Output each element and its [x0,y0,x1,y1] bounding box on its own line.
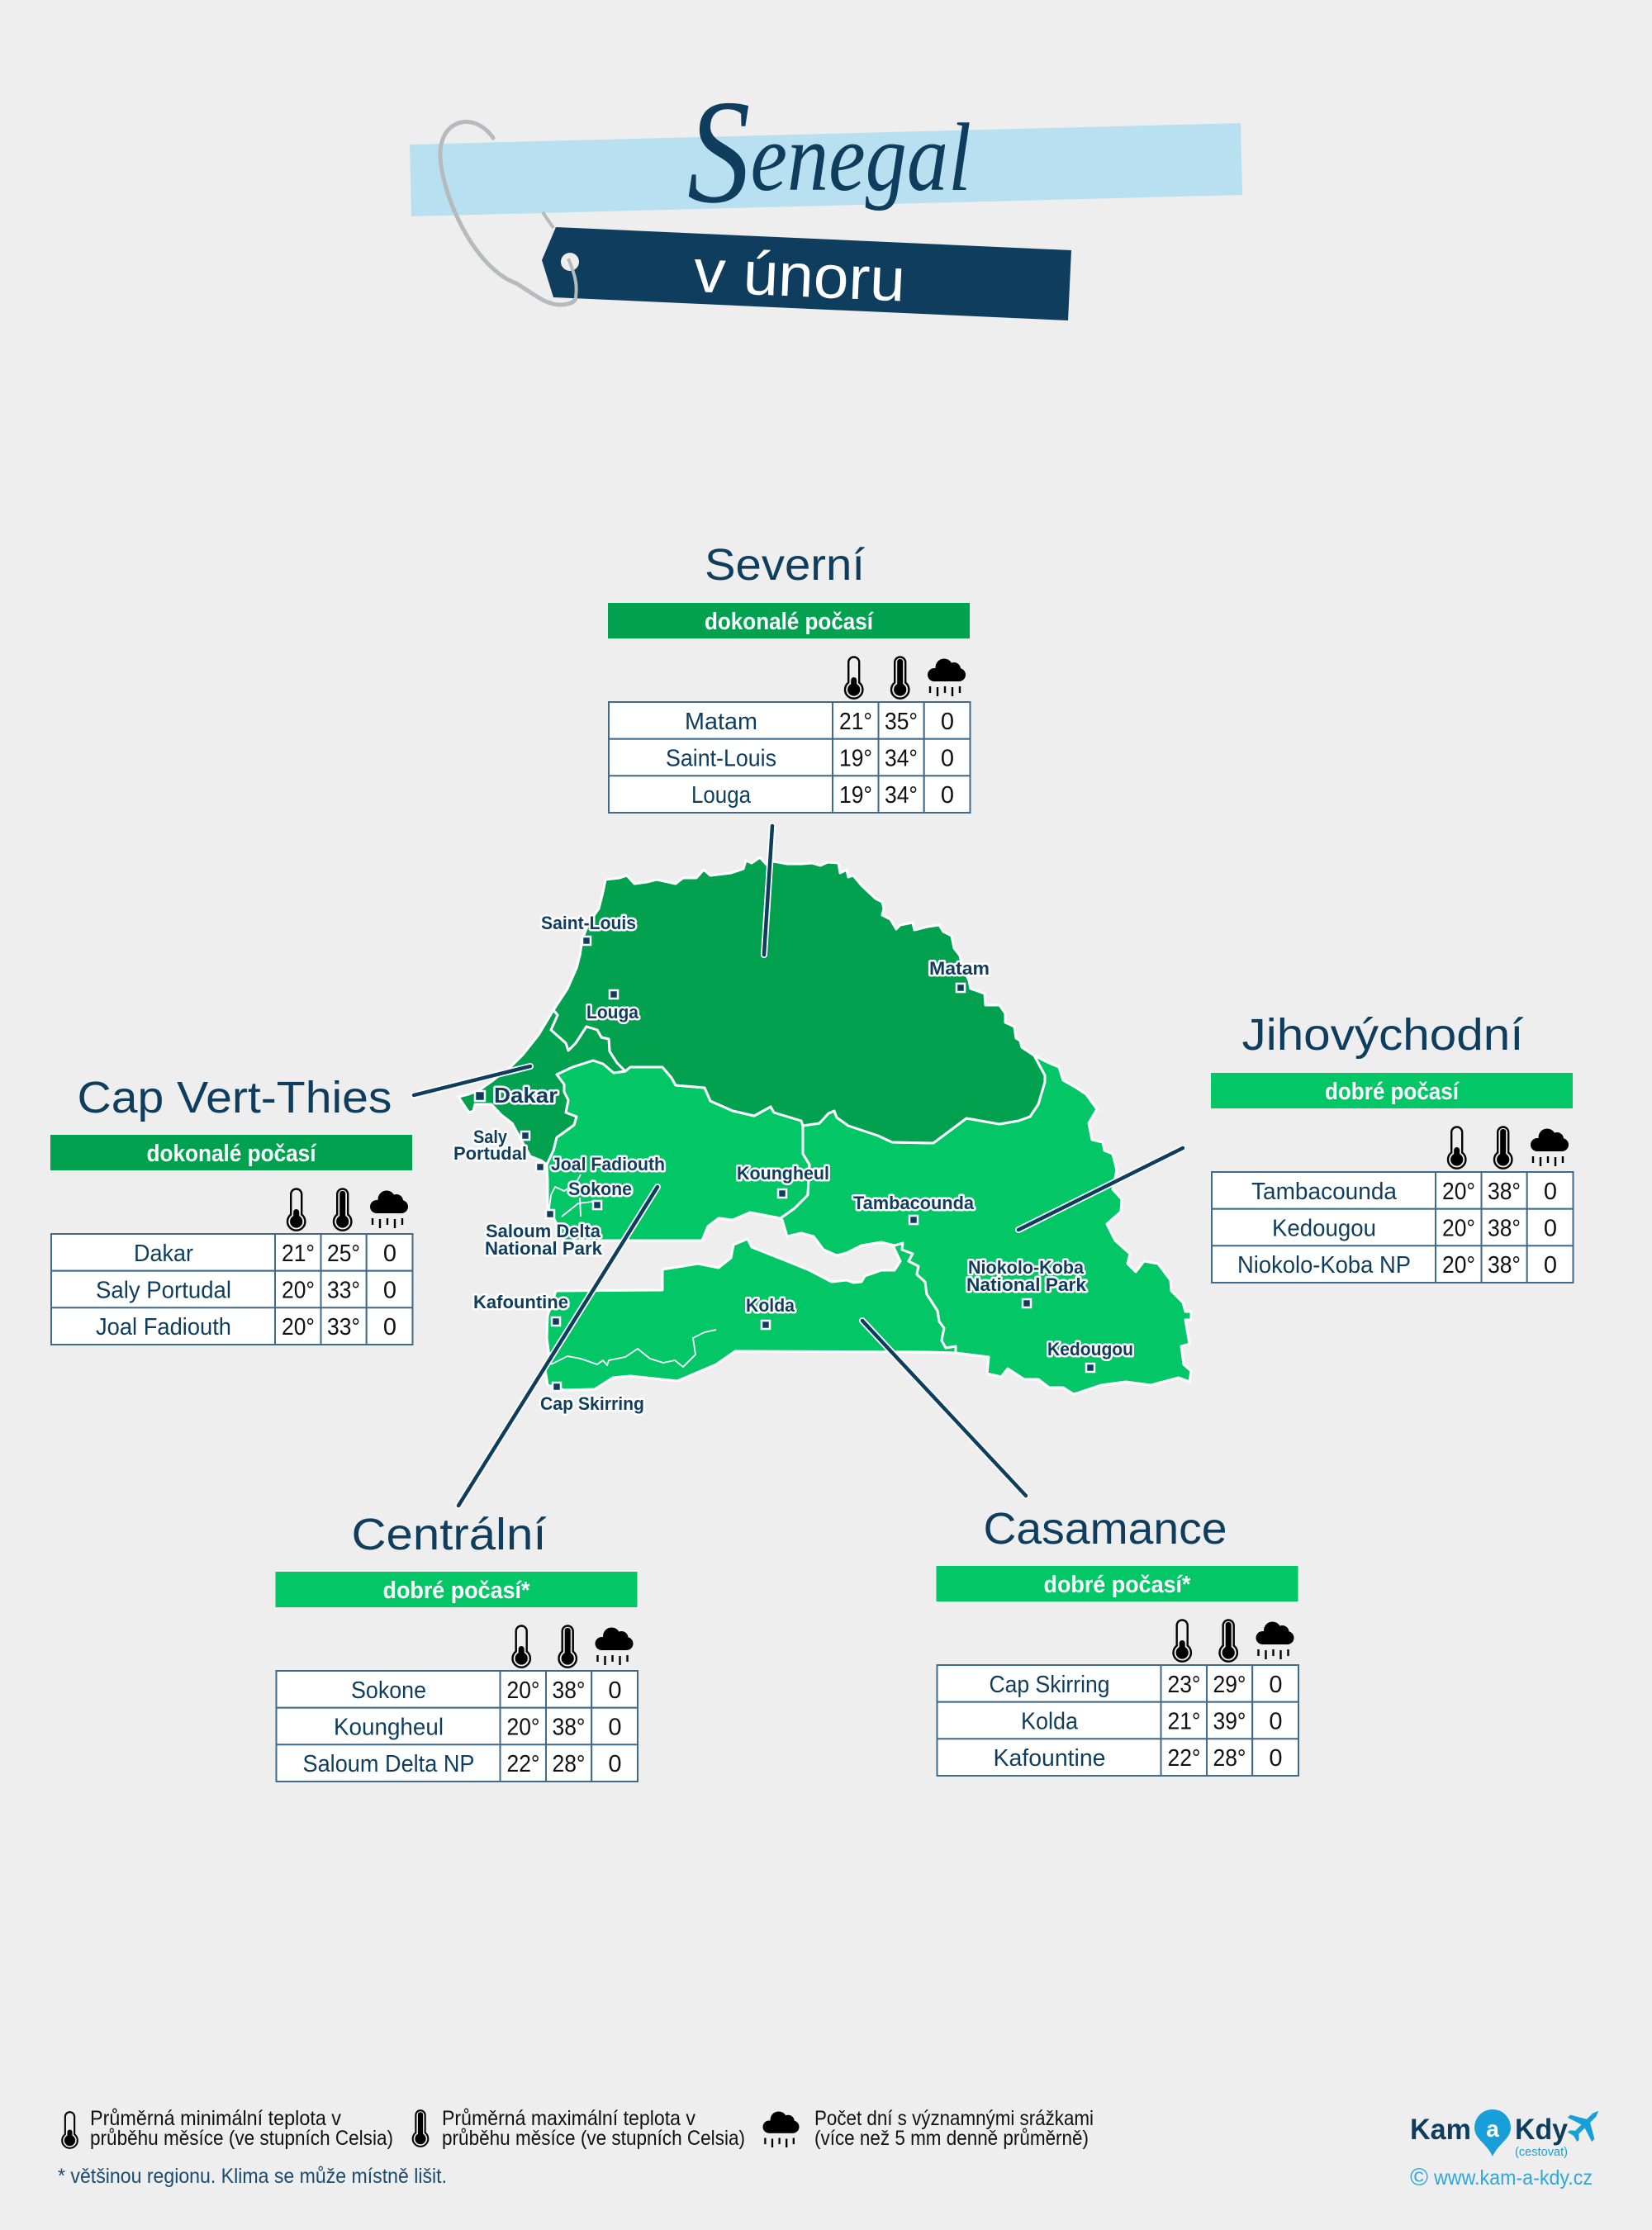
climate table: 20° [507,1677,540,1704]
city: Kolda: Kolda [746,1295,795,1316]
climate table: 38° [552,1715,585,1741]
title band [410,123,1242,216]
city: Louga: Louga [586,1002,639,1022]
climate table: 20° [507,1715,540,1741]
city: Niokolo-Koba National Park: National Park [966,1274,1087,1295]
climate table: 0 [1544,1252,1557,1279]
climate table: 0 [941,709,954,735]
city: Cap Skirring: Cap Skirring [540,1393,644,1414]
weather band: dokonalé počasí [147,1141,316,1167]
legend [58,2107,1094,2188]
legend item: rainy days [763,2107,1094,2150]
city: Joal Fadiouth: Joal Fadiouth [551,1154,665,1174]
column icons [512,1625,633,1668]
city: Cap Skirring [540,1383,644,1414]
panel: Cap Vert-Thies [50,1073,413,1345]
city: Saly Portudal: Portudal [453,1143,527,1164]
climate table: 29° [1213,1672,1246,1698]
city: Matam [929,958,990,992]
title: Senegal: S [687,70,750,235]
legend item: maximum temperature: Průměrná maximální teplota v [442,2107,695,2130]
column icons [1173,1620,1294,1662]
weather band: dobré počasí [1325,1079,1460,1105]
climate table: 0 [941,782,954,809]
leader line: Centrální [458,1187,657,1506]
column icons [287,1189,408,1231]
climate table: 20° [282,1314,315,1340]
city: Kedougou: Kedougou [1047,1339,1133,1359]
string front [543,212,577,305]
heading: Centrální [352,1510,547,1559]
climate table: Kafountine [993,1745,1105,1772]
column icons [1448,1127,1569,1169]
climate table [937,1665,1298,1776]
logo word: Kam: Kam [1410,2114,1471,2146]
climate table: 20° [282,1277,315,1303]
city: Niokolo-Koba National Park: Niokolo-Koba [968,1257,1085,1278]
climate table: 0 [1269,1672,1283,1698]
city: Saly Portudal: Saly [473,1127,508,1147]
weather band [276,1572,638,1607]
climate table: 38° [1488,1216,1521,1242]
climate table [51,1234,413,1345]
city: Niokolo-Koba National Park [966,1257,1087,1307]
region: Cap Vert-Thies [458,1010,625,1165]
logo word: Kdy: Kdy [1515,2114,1569,2146]
climate table: 28° [1213,1745,1246,1772]
logo pin [1474,2109,1511,2156]
climate table: 39° [1213,1708,1246,1734]
tag string [440,122,576,305]
climate table: Louga [691,782,752,809]
city: Tambacounda [853,1193,975,1224]
climate table: Niokolo-Koba NP [1237,1252,1411,1279]
legend item: rainy days: (více než 5 mm denně průměrně) [814,2127,1089,2150]
climate table: Saloum Delta NP [302,1751,474,1777]
climate table: 22° [1168,1745,1201,1772]
climate table: Koungheul [334,1715,444,1741]
title: Senegal: enegal [750,102,971,211]
legend item: minimum temperature [62,2107,393,2150]
climate table: 0 [1269,1708,1283,1734]
logo pin: a [1486,2116,1499,2142]
climate table: Matam [685,709,757,735]
climate table [1212,1172,1573,1283]
logo: Kam a Kdy [1410,2099,1611,2191]
legend item: minimum temperature: průběhu měsíce (ve stupních Celsia) [90,2127,393,2150]
climate table: 20° [1442,1252,1475,1279]
city: Saly Portudal [453,1127,529,1164]
climate table: Tambacounda [1251,1179,1398,1205]
column icons [845,657,966,699]
climate table: 19° [839,782,872,809]
heading: Casamance [983,1504,1227,1554]
climate table: Kolda [1021,1708,1079,1734]
climate table: 23° [1168,1672,1201,1698]
city: Kafountine: Kafountine [473,1292,568,1312]
climate table: 21° [839,709,872,735]
rivers [549,1174,716,1367]
weather band: dobré počasí* [383,1578,530,1604]
city: Kafountine [473,1292,568,1326]
copyright mark: © [1410,2164,1428,2191]
weather band [1211,1073,1573,1108]
climate table: 0 [1544,1216,1557,1242]
map city labels [453,913,1133,1414]
title block [410,70,1242,320]
climate table: Sokone [351,1677,426,1704]
tag hole [561,253,579,271]
climate table [609,702,970,813]
region: Severní [551,857,1045,1143]
heading: Jihovýchodní [1242,1010,1523,1060]
city: Dakar: Dakar [494,1083,558,1108]
leader line: Cap Vert-Thies [414,1066,530,1095]
climate table: 38° [1488,1252,1521,1279]
climate table: Saint-Louis [666,745,776,771]
city: Koungheul [737,1163,829,1198]
climate table: Cap Skirring [990,1672,1110,1698]
climate table: 35° [885,709,918,735]
climate table: 21° [1168,1708,1201,1734]
panel: Jihovýchodní [1211,1010,1573,1283]
city: Sokone: Sokone [568,1179,632,1199]
city: Matam: Matam [929,958,990,979]
city: Kedougou [1047,1339,1133,1372]
city: Saloum Delta National Park [485,1210,603,1259]
climate table: 28° [552,1751,585,1777]
city: Koungheul: Koungheul [737,1163,829,1184]
leader line: Severní [764,826,772,955]
climate table: 0 [383,1314,396,1340]
climate table: 20° [1442,1179,1475,1205]
climate table: 0 [941,745,954,771]
region: Centrální [547,1060,809,1241]
climate table: Dakar [134,1241,193,1267]
city: Saloum Delta National Park: National Park [485,1238,603,1259]
climate table: Saly Portudal [96,1277,231,1303]
climate table: 22° [507,1751,540,1777]
climate table: 0 [1269,1745,1283,1772]
city: Louga [586,990,639,1022]
climate table [276,1671,638,1782]
panel: Centrální [276,1510,638,1782]
weather band: dokonalé počasí [705,609,874,635]
logo plane [1560,2099,1611,2149]
climate table: 21° [282,1241,315,1267]
subtitle: v únoru: v únoru [692,236,907,315]
climate table: 25° [327,1241,360,1267]
climate table: 0 [608,1677,622,1704]
climate table: Joal Fadiouth [96,1314,231,1340]
price tag [542,227,1071,320]
climate table: 19° [839,745,872,771]
climate table: 0 [1544,1179,1557,1205]
map of Senegal [458,857,1191,1394]
climate table: Kedougou [1272,1216,1376,1242]
climate table: 0 [608,1751,622,1777]
climate table: 20° [1442,1216,1475,1242]
city: Tambacounda: Tambacounda [853,1193,975,1213]
climate table: 0 [383,1277,396,1303]
climate table: 33° [327,1314,360,1340]
legend item: rainy days: Počet dní s významnými srážkami [814,2107,1094,2130]
weather band [937,1566,1298,1601]
climate table: 38° [552,1677,585,1704]
climate table: 34° [885,782,918,809]
city: Saint-Louis: Saint-Louis [541,913,636,933]
legend item: minimum temperature: Průměrná minimální teplota v [90,2107,341,2130]
city: Saint-Louis [541,913,636,945]
heading: Severní [705,540,865,590]
footnote: * většinou regionu. Klima se může místně lišit. [58,2165,447,2188]
website: www.kam-a-kdy.cz [1433,2166,1593,2190]
climate table: 34° [885,745,918,771]
city: Sokone [568,1179,632,1209]
logo tagline: (cestovat) [1515,2145,1568,2159]
weather band: dobré počasí* [1044,1572,1191,1598]
city: Saloum Delta National Park: Saloum Delta [486,1221,601,1241]
region: Casamance [545,1239,956,1390]
heading: Cap Vert-Thies [78,1073,392,1122]
climate table: 38° [1488,1179,1521,1205]
region: Jihovýchodní [781,1056,1191,1394]
city: Kolda [746,1295,795,1329]
legend item: maximum temperature [413,2107,745,2150]
weather band [50,1135,412,1170]
legend item: maximum temperature: průběhu měsíce (ve stupních Celsia) [442,2127,745,2150]
climate table: 0 [383,1241,396,1267]
panel: Severní [608,540,970,813]
panel: Casamance [937,1504,1298,1776]
leader line: Jihovýchodní [1018,1148,1183,1230]
climate table: 0 [608,1715,622,1741]
leader line: Casamance [862,1321,1026,1496]
climate table: 33° [327,1277,360,1303]
weather band [608,603,970,638]
